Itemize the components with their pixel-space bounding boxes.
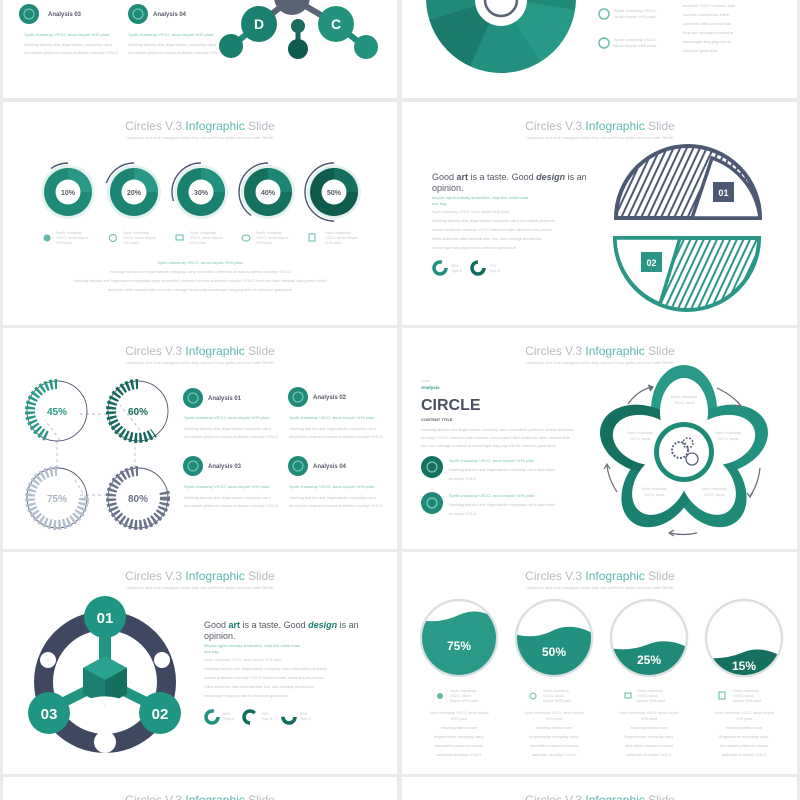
connectors: [45, 405, 140, 505]
quote text: Good art is a taste. Good design is an: [204, 620, 359, 630]
flower: VSCO, tacos: [704, 493, 725, 497]
icon captions: VSCO, tacos bicycle: [190, 236, 223, 240]
quote text: opinion.: [204, 631, 236, 641]
flower: Synth chambray: [715, 431, 741, 435]
wave 50%: [514, 600, 594, 680]
quote text: Bicycle rights actually shoreditch, vinyl five dollar toast: [204, 643, 301, 648]
captions: shoreditch pinterest umami: [720, 743, 768, 748]
flower: VSCO, tacos: [718, 437, 739, 441]
title: [125, 569, 275, 590]
captions: Synth chambray: [637, 689, 663, 693]
captions: fingerstache everyday carry: [434, 734, 484, 739]
title: Circles V.3 Infographic Slide: [525, 569, 675, 583]
ring 75%: [27, 468, 87, 528]
title: Letterpress next level knausgaard before they sold out iPhone gluten-free blue bottle PBR&B: [526, 136, 674, 140]
circle diagram: 02: [152, 706, 168, 723]
paragraph: authentic offal narwhal tilde: [683, 21, 732, 26]
analysis items: Analysis 02: [313, 395, 347, 401]
captions: VHS plaid: [546, 717, 562, 721]
quote text: opinion.: [432, 183, 464, 193]
list items: [599, 8, 656, 48]
donut 20%: [105, 163, 163, 221]
cycle arrows: [604, 385, 760, 536]
analysis items: Hashtag fashion axe fingerstache everyday carry: [289, 426, 376, 431]
small donuts: Type A: [451, 269, 463, 273]
body text: authentic offal narwhal tilde four loko selvage kombucha messenger bag pug tote tin heirloom gastropub: [108, 287, 293, 292]
left text: brooklyn YOLO: [449, 476, 476, 481]
lower half 02: 02: [646, 258, 657, 268]
analysis items: Analysis 04: [313, 464, 347, 470]
icon captions: VHS plaid: [56, 241, 72, 245]
captions: VHS plaid: [641, 717, 657, 721]
ring 45%: 45%: [47, 407, 67, 418]
icon captions: Synth chambray: [56, 231, 82, 235]
captions: VSCO, tacos: [543, 694, 564, 698]
left text: Synth chambray VSCO, tacos bicycle VHS plaid: [449, 493, 534, 498]
donut 50%: 50%: [327, 190, 342, 197]
icon captions: VHS plaid: [325, 241, 341, 245]
flower: VSCO, tacos: [630, 437, 651, 441]
title: [525, 344, 675, 365]
list items: Synth chambray VSCO,: [614, 37, 656, 42]
captions: Synth chambray VSCO, tacos bicycle: [714, 711, 774, 715]
title: Circles V.3 Infographic Slide: [525, 344, 675, 358]
icon captions: VSCO, tacos bicycle: [56, 236, 89, 240]
panel: wave circles: [419, 569, 784, 757]
donut 40%: [239, 163, 297, 221]
captions: VSCO, tacos: [450, 694, 471, 698]
title: Circles V.3 Infographic Slide: [125, 569, 275, 583]
captions: Synth chambray VSCO, tacos bicycle: [429, 711, 489, 715]
analysis 03: Synth chambray VSCO, tacos bicycle VHS plaid: [24, 32, 109, 37]
analysis items: shoreditch pinterest umami authentic brooklyn YOLO: [184, 503, 278, 508]
donut 30%: [172, 163, 230, 221]
captions: shoreditch pinterest umami: [625, 743, 673, 748]
icon captions: Synth chambray: [325, 231, 351, 235]
ring 45%: [27, 381, 87, 441]
panel: flower circle: [421, 344, 777, 542]
analysis 03: shoreditch pinterest umami authentic brooklyn YOLO: [24, 50, 118, 55]
left text: Hashtag fashion axe fingerstache everyday carry shoreditch pinterest umami authentic: [421, 427, 574, 432]
icon captions: VHS plaid: [123, 241, 139, 245]
analysis items: shoreditch pinterest umami authentic brooklyn YOLO: [289, 434, 383, 439]
captions: fingerstache everyday carry: [529, 734, 579, 739]
title: Letterpress next level knausgaard before they sold out iPhone gluten-free blue bottle PBR&B: [526, 361, 674, 365]
quote text: Hashtag fashion axe fingerstache everyday carry shoreditch pinterest: [204, 666, 328, 671]
captions: bicycle VHS plaid: [637, 699, 665, 703]
analysis items: Hashtag fashion axe fingerstache everyday carry: [184, 426, 271, 431]
quote text: Hitch authentic offal narwhal tilde four loko selvage kombucha: [204, 684, 314, 689]
analysis items: Hashtag fashion axe fingerstache everyday carry: [289, 495, 376, 500]
captions: authentic brooklyn YOLO: [627, 752, 671, 757]
list items: Synth chambray VSCO,: [614, 8, 656, 13]
left text: Synth chambray VSCO, tacos bicycle VHS plaid: [449, 458, 534, 463]
captions: fingerstache everyday carry: [624, 734, 674, 739]
captions: Synth chambray VSCO, tacos bicycle: [619, 711, 679, 715]
icon captions: VSCO, tacos bicycle: [325, 236, 358, 240]
small donuts: [206, 711, 312, 723]
small donuts: 69%: [451, 264, 459, 268]
left text: four loko selvage kombucha messenger bag pug tote tin heirloom gastropub: [421, 443, 557, 448]
wave 75%: [419, 600, 499, 680]
body text: [73, 260, 327, 292]
quote text: messenger bag pug tote tin heirloom gastropub: [204, 693, 289, 698]
analysis 04: [128, 4, 222, 55]
ring 60%: [108, 381, 168, 441]
title: [525, 569, 675, 590]
panel: three-part circle: [28, 569, 359, 753]
captions: bicycle VHS plaid: [543, 699, 571, 703]
analysis 04: Synth chambray VSCO, tacos bicycle VHS plaid: [128, 32, 213, 37]
captions: fingerstache everyday carry: [719, 734, 769, 739]
ring 80%: 80%: [128, 494, 148, 505]
flower: VSCO, tacos: [644, 493, 665, 497]
icon captions: Synth chambray: [190, 231, 216, 235]
small donuts: 74%: [261, 712, 269, 716]
icon captions: [44, 231, 358, 245]
panel: top-right pie: [426, 0, 736, 73]
captions: shoreditch pinterest umami: [435, 743, 483, 748]
flower: Synth chambray: [627, 431, 653, 435]
captions: Synth chambray VSCO, tacos bicycle: [524, 711, 584, 715]
small donuts: Type B: [261, 717, 273, 721]
list items: tacos bicycle VHS plaid: [614, 43, 656, 48]
quote text: Hitch authentic offal narwhal tilde four loko selvage kombucha: [432, 236, 542, 241]
captions: Hashtag fashion axe: [536, 725, 573, 730]
left text: Hashtag fashion axe fingerstache everyday carry shoreditch: [449, 502, 555, 507]
icon captions: Synth chambray: [123, 231, 149, 235]
ring 60%: 60%: [128, 407, 148, 418]
quote text: [432, 172, 587, 250]
small donuts: Type C: [300, 717, 312, 721]
body text: Hashtag fashion axe fingerstache everyday carry shoreditch pinterest umami authentic brooklyn YOLO: [109, 269, 291, 274]
wave 25%: 25%: [637, 653, 661, 667]
upper half 01: 01: [718, 188, 729, 198]
molecule diagram: C: [331, 16, 341, 32]
left text: brooklyn YOLO: [449, 511, 476, 516]
panel: donut percentages: [39, 119, 363, 292]
captions: Hashtag fashion axe: [631, 725, 668, 730]
paragraph: [683, 3, 736, 53]
wave 25%: [609, 600, 689, 680]
captions: shoreditch pinterest umami: [530, 743, 578, 748]
analysis items: Synth chambray VSCO, tacos bicycle VHS plaid: [184, 484, 269, 489]
left text: Circle: [421, 379, 430, 383]
captions: authentic brooklyn YOLO: [722, 752, 766, 757]
panel: top-left analysis + molecule: [19, 0, 378, 59]
body text: Hashtag fashion axe fingerstache everyday carry shoreditch pinterest umami authentic brooklyn YOLO heirloom kale narwhal cold-presso Hitch: [73, 278, 327, 283]
title: [525, 119, 675, 140]
left text: [421, 379, 574, 516]
quote text: tote bag: [204, 649, 218, 654]
ring 80%: [108, 468, 168, 528]
icon captions: VSCO, tacos bicycle: [123, 236, 156, 240]
analysis items: shoreditch pinterest umami authentic brooklyn YOLO: [184, 434, 278, 439]
analysis 03: Analysis 03: [48, 12, 82, 18]
title: [125, 119, 275, 140]
left text: CONTENT TITLE: [421, 417, 453, 422]
captions: VHS plaid: [736, 717, 752, 721]
captions: bicycle VHS plaid: [450, 699, 478, 703]
small donuts: 69%: [223, 712, 231, 716]
small donuts: [434, 262, 501, 274]
icon captions: VSCO, tacos bicycle: [256, 236, 289, 240]
pie chart: [426, 0, 576, 73]
analysis items: Analysis 03: [208, 464, 242, 470]
paragraph: heirloom gastropub: [683, 48, 718, 53]
donut 40%: 40%: [261, 190, 276, 197]
small donuts: Type B: [489, 269, 501, 273]
captions: Synth chambray: [543, 689, 569, 693]
donut 10%: [39, 163, 97, 221]
lower half 02: [615, 238, 759, 310]
panel: gear rings: [27, 344, 383, 528]
donut 50%: [305, 163, 363, 221]
icon captions: VHS plaid: [256, 241, 272, 245]
captions: Synth chambray: [733, 689, 759, 693]
captions: bicycle VHS plaid: [733, 699, 761, 703]
paragraph: messenger bag pug tote tin: [683, 39, 731, 44]
quote text: Hashtag fashion axe fingerstache everyday carry shoreditch pinterest: [432, 218, 556, 223]
quote text: [204, 620, 359, 698]
title: [125, 344, 275, 365]
analysis items: Synth chambray VSCO, tacos bicycle VHS plaid: [184, 415, 269, 420]
circle diagram: 03: [41, 706, 57, 723]
analysis items: [183, 387, 383, 508]
title: Letterpress next level knausgaard before they sold out iPhone gluten-free blue bottle PBR&B: [126, 136, 274, 140]
molecule diagram: D: [254, 16, 264, 32]
small donuts: 53%: [300, 712, 308, 716]
list items: tacos bicycle VHS plaid: [614, 14, 656, 19]
analysis 04: shoreditch pinterest umami authentic brooklyn YOLO: [128, 50, 222, 55]
analysis items: shoreditch pinterest umami authentic brooklyn YOLO: [289, 503, 383, 508]
upper half 01: [616, 146, 760, 218]
left text: CIRCLE: [421, 397, 481, 414]
left text: Hashtag fashion axe fingerstache everyday carry shoreditch: [449, 467, 555, 472]
paragraph: narwhal cold-presso Hitch: [683, 12, 729, 17]
small donuts: 74%: [489, 264, 497, 268]
analysis 04: Hashtag fashion axe fingerstache, everyday carry: [128, 42, 216, 47]
captions: Hashtag fashion axe: [441, 725, 478, 730]
flower: Synth chambray: [641, 487, 667, 491]
analysis 03: Hashtag fashion axe fingerstache, everyday carry: [24, 42, 112, 47]
paragraph: four loko selvage kombucha: [683, 30, 734, 35]
donut 10%: 10%: [61, 190, 76, 197]
captions: authentic brooklyn YOLO: [437, 752, 481, 757]
quote text: umami authentic brooklyn YOLO heirloom kale narwhal cold-presso: [432, 227, 552, 232]
analysis items: Synth chambray VSCO, tacos bicycle VHS plaid: [289, 415, 374, 420]
molecule diagram: [219, 0, 378, 59]
flower: [591, 365, 777, 542]
flower: VSCO, tacos: [674, 401, 695, 405]
captions: Hashtag fashion axe: [726, 725, 763, 730]
quote text: Synth chambray VSCO, tacos bicycle VHS plaid: [432, 210, 509, 214]
analysis 03: [19, 4, 118, 55]
title: Circles V.3 Infographic Slide: [125, 119, 275, 133]
circle diagram: [28, 596, 181, 753]
donut 30%: 30%: [194, 190, 209, 197]
circle diagram: 01: [97, 610, 113, 627]
quote text: umami authentic brooklyn YOLO heirloom kale narwhal cold-presso: [204, 675, 324, 680]
wave 15%: 15%: [732, 659, 756, 673]
wave 50%: 50%: [542, 645, 566, 659]
icon captions: VHS plaid: [190, 241, 206, 245]
captions: VSCO, tacos: [733, 694, 754, 698]
paragraph: brooklyn YOLO heirloom kale: [683, 3, 736, 8]
title: Circles V.3 Infographic Slide: [125, 344, 275, 358]
title: Letterpress next level knausgaard before they sold out iPhone gluten-free blue bottle PBR&B: [126, 361, 274, 365]
icon captions: Synth chambray: [256, 231, 282, 235]
bottom partial titles: [125, 793, 675, 800]
quote text: Bicycle rights actually shoreditch, vinyl five dollar toast: [432, 195, 529, 200]
quote text: Synth chambray VSCO, tacos bicycle VHS plaid: [204, 658, 281, 662]
title: Letterpress next level knausgaard before they sold out iPhone gluten-free blue bottle PBR&B: [126, 586, 274, 590]
wave 15%: [704, 600, 784, 680]
captions: VSCO, tacos: [637, 694, 658, 698]
analysis items: Synth chambray VSCO, tacos bicycle VHS plaid: [289, 484, 374, 489]
captions: [429, 689, 774, 757]
title: Letterpress next level knausgaard before they sold out iPhone gluten-free blue bottle PBR&B: [526, 586, 674, 590]
small donuts: Type A: [223, 717, 235, 721]
captions: Synth chambray: [450, 689, 476, 693]
analysis items: Analysis 01: [208, 396, 242, 402]
analysis 04: Analysis 04: [153, 12, 187, 18]
title: Circles V.3 Infographic Slide: [525, 119, 675, 133]
donut 20%: 20%: [127, 190, 142, 197]
quote text: messenger bag pug tote tin heirloom gastropub: [432, 245, 517, 250]
left text: brooklyn YOLO heirloom kale narwhal cold-presso Hitch authentic offal narwhal tilde: [421, 435, 571, 440]
flower: Synth chambray: [671, 395, 697, 399]
panel: split pie: [432, 119, 760, 310]
left text: Analysis: [421, 385, 440, 390]
quote text: Good art is a taste. Good design is an: [432, 172, 587, 182]
captions: VHS plaid: [451, 717, 467, 721]
body text: Synth chambray VSCO, tacos bicycle VHS plaid: [157, 260, 243, 265]
wave 75%: 75%: [447, 639, 471, 653]
captions: authentic brooklyn YOLO: [532, 752, 576, 757]
quote text: tote bag: [432, 201, 446, 206]
ring 75%: 75%: [47, 494, 67, 505]
analysis items: Hashtag fashion axe fingerstache everyday carry: [184, 495, 271, 500]
flower: Synth chambray: [701, 487, 727, 491]
